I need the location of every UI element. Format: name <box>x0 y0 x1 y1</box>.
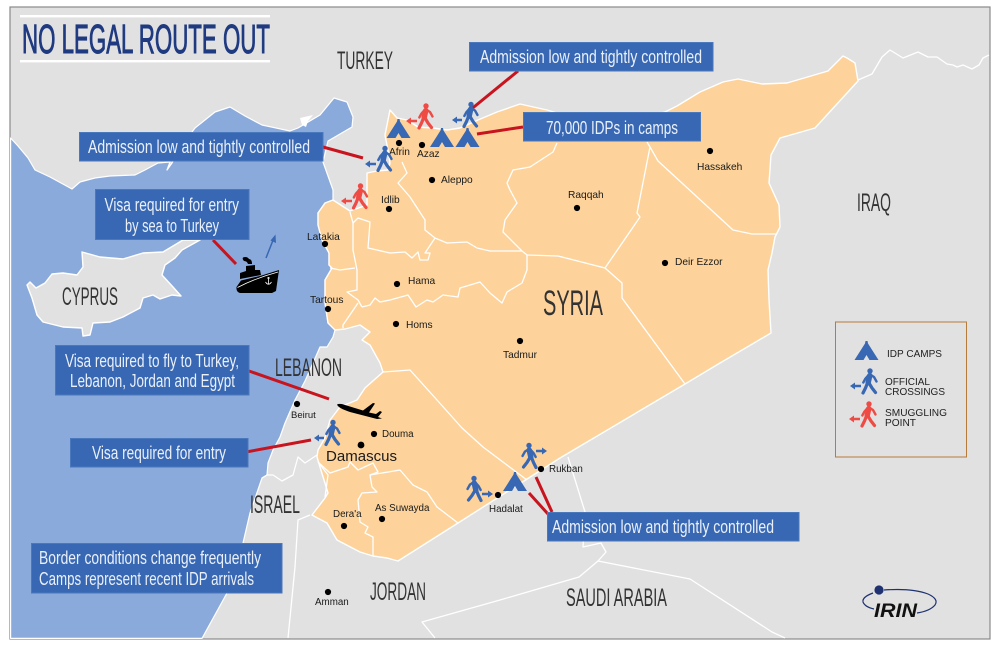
icon: ship <box>236 257 279 293</box>
label: Syria: SYRIA <box>543 284 603 323</box>
city: Rukban: Rukban <box>549 464 583 475</box>
official crossing: Hadalat <box>468 476 493 500</box>
callout: bottom admission: Admission low and tightly controlled <box>552 517 774 537</box>
city: Hadalat: Hadalat <box>489 504 523 515</box>
city: Dera'a: Dera'a <box>333 509 362 520</box>
label: Israel: ISRAEL <box>250 491 300 519</box>
callout: visa to fly <box>56 346 249 395</box>
city: Azaz <box>417 142 440 160</box>
label: Turkey: TURKEY <box>337 47 393 75</box>
map: Syria <box>312 56 858 561</box>
city: Beirut <box>291 401 316 421</box>
city: Idlib <box>381 195 400 212</box>
city: Homs: Homs <box>406 320 433 331</box>
city: Tadmur: Tadmur <box>503 350 538 361</box>
official crossing: top <box>452 102 478 126</box>
city: Hassakeh: Hassakeh <box>697 162 742 173</box>
callout: top admission <box>470 42 713 71</box>
official crossing: Afrin <box>365 146 392 170</box>
map: Cyprus <box>27 240 200 336</box>
callout: visa by sea: by sea to Turkey <box>125 216 219 236</box>
legend: smuggling point: POINT <box>885 417 917 429</box>
city: Dera'a <box>333 509 362 529</box>
legend: smuggling point <box>849 401 947 429</box>
callout: left admission <box>80 132 323 161</box>
map: governorate boundaries <box>318 142 777 556</box>
city: Raqqah <box>568 190 604 211</box>
title: NO LEGAL ROUTE OUT <box>22 16 270 62</box>
logo: IRIN <box>863 585 936 622</box>
callout: border conditions: Border conditions change frequently <box>39 548 261 568</box>
legend: official crossings: OFFICIAL <box>885 376 930 388</box>
city: Latakia: Latakia <box>307 232 340 243</box>
city: Afrin <box>389 140 410 158</box>
callout: border conditions: Camps represent recent IDP arrivals <box>39 569 254 589</box>
city: Hadalat <box>489 492 523 515</box>
label: Iraq: IRAQ <box>857 189 891 217</box>
cities <box>291 140 742 608</box>
legend <box>836 322 966 457</box>
official crossing: Damascus <box>314 420 340 444</box>
icon: plane <box>337 403 382 419</box>
icon: sea route arrow <box>266 234 276 258</box>
city: Damascus <box>326 442 397 465</box>
map: neighbouring country borders <box>262 50 989 638</box>
callout: border conditions <box>32 544 282 593</box>
city: Azaz: Azaz <box>417 149 440 160</box>
callout: visa to fly: Visa required to fly to Turkey, <box>65 351 239 371</box>
city: Aleppo: Aleppo <box>441 175 473 186</box>
callout: bottom admission <box>548 512 799 541</box>
label: Cyprus: CYPRUS <box>62 283 118 311</box>
legend: IDP camps: IDP CAMPS <box>887 348 942 360</box>
city: Beirut: Beirut <box>291 410 316 421</box>
city: As Suwayda: As Suwayda <box>375 503 430 514</box>
callout: top admission: Admission low and tightly controlled <box>480 47 702 67</box>
callout: visa for entry <box>70 438 248 467</box>
city: Tadmur <box>503 338 538 361</box>
legend: smuggling point: SMUGGLING <box>885 407 947 419</box>
label: Saudi Arabia: SAUDI ARABIA <box>566 584 667 612</box>
city: Douma: Douma <box>382 429 414 440</box>
city: Raqqah: Raqqah <box>568 190 604 201</box>
city: Deir Ezzor: Deir Ezzor <box>675 257 723 268</box>
callout: visa for entry: Visa required for entry <box>92 443 226 463</box>
callout: left admission: Admission low and tightly controlled <box>88 137 310 157</box>
tents: IDP camps <box>386 119 527 491</box>
city: Hassakeh <box>697 148 742 173</box>
legend: official crossings <box>850 368 945 398</box>
legend: official crossings: CROSSINGS <box>885 386 945 398</box>
callout: visa by sea <box>96 190 249 240</box>
sea <box>11 98 353 638</box>
connector lines <box>213 71 552 514</box>
city: Idlib: Idlib <box>381 195 400 206</box>
city: Amman: Amman <box>315 597 349 608</box>
smuggling point: north <box>406 103 432 128</box>
label: Lebanon: LEBANON <box>275 354 342 382</box>
city: Tartous: Tartous <box>310 295 343 306</box>
gulf island <box>300 115 313 127</box>
city: Damascus: Damascus <box>326 449 397 465</box>
city: Amman <box>315 589 349 608</box>
city: Afrin: Afrin <box>389 147 410 158</box>
city: Hama <box>394 276 436 287</box>
label: Jordan: JORDAN <box>370 578 426 606</box>
callout: 70,000 IDPs <box>524 112 700 141</box>
official crossing: Rukban <box>522 443 547 468</box>
city: Tartous <box>310 295 343 312</box>
callout: visa by sea: Visa required for entry <box>104 195 239 215</box>
city: Homs <box>393 320 433 331</box>
callout: visa to fly: Lebanon, Jordan and Egypt <box>70 371 235 391</box>
smuggling point: Idlib <box>341 183 367 208</box>
callout: 70,000 IDPs: 70,000 IDPs in camps <box>546 118 678 138</box>
logo: IRIN: IRIN <box>874 601 918 622</box>
city: Hama: Hama <box>408 276 436 287</box>
city: As Suwayda <box>375 503 430 522</box>
